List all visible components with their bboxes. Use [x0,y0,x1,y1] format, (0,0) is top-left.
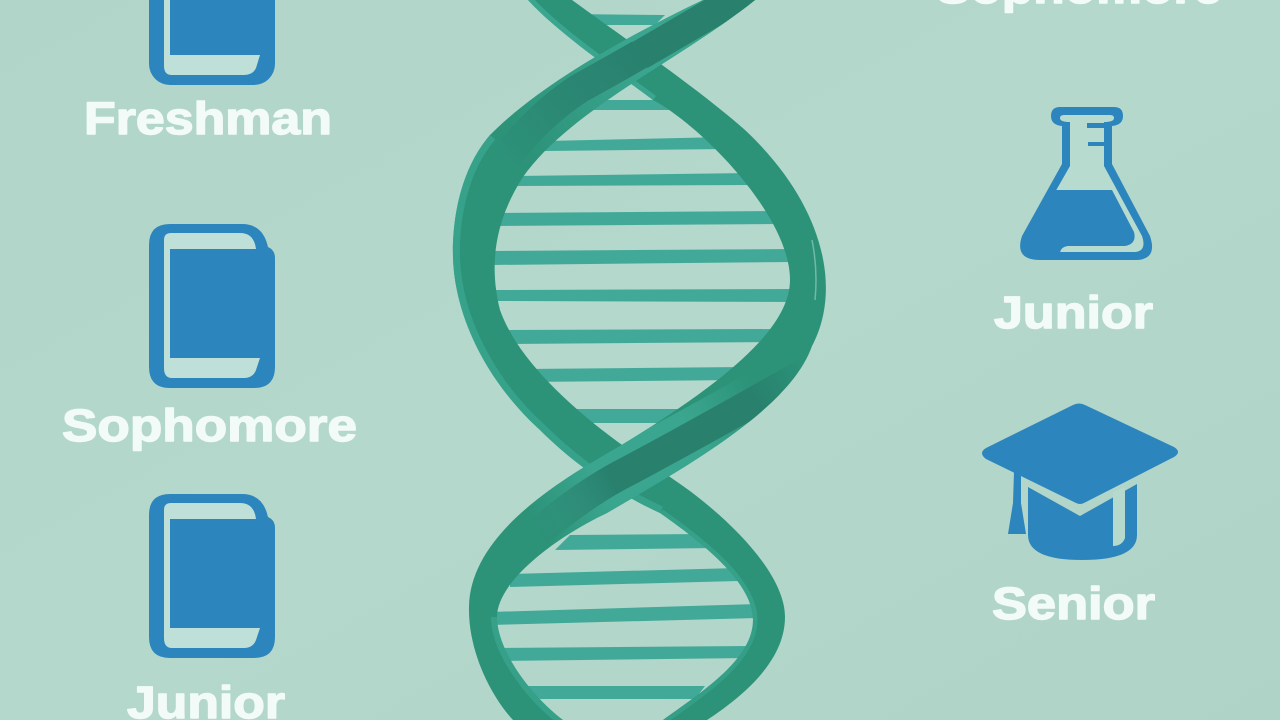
label: Sophomore: Sophomore [62,400,357,451]
icon: book (Junior) [149,494,275,658]
label: Freshman: Freshman [84,93,332,144]
icon: flask (Junior) [1020,107,1152,260]
helix strand: top right to left bulge to lower right [452,0,785,720]
helix overlap: lower crossing front band [497,370,810,720]
DNA double helix [452,0,826,720]
helix strand: top left to right bulge to lower left [468,0,826,720]
helix rungs [490,14,795,699]
icon: book (Sophomore) [149,224,275,388]
icon: graduation cap (Senior) [982,404,1178,560]
label: Senior: Senior [992,578,1155,629]
label: Junior (right): Junior [994,287,1153,338]
icon: book (Freshman) [149,0,275,85]
